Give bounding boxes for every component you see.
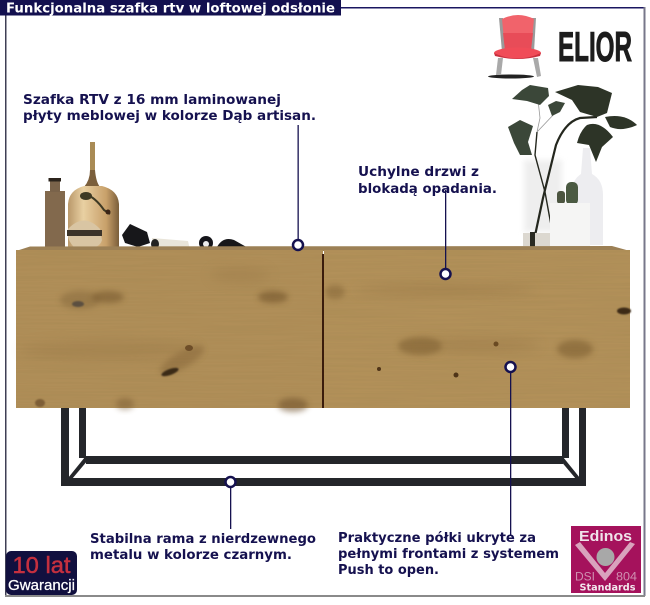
text: laminated board [23,93,316,124]
text: shelves: Praktyczne półki ukryte za [338,531,536,546]
Edinos certificate badge: Edinos [579,529,632,545]
text: shelves: pełnymi frontami z systemem [338,547,559,562]
cabinet top [16,246,630,251]
text: laminated board: Szafka RTV z 16 mm laminowanej [23,93,281,108]
text: frame [90,532,316,563]
text: shelves [338,531,559,578]
right door [324,250,631,408]
metal frame [61,408,586,486]
decor: plant and vases [508,85,637,249]
warranty badge: Gwarancji [8,578,75,594]
base ring [523,232,550,247]
leader line: shelves [506,362,516,535]
logo: Elior [488,15,632,78]
cabinet [16,246,631,412]
leader line: frame [226,477,236,529]
text: shelves: Push to open. [338,563,439,578]
warranty badge: 10 lat [12,552,71,578]
Edinos certificate badge: DSI [575,570,595,584]
black stones and white objects [122,224,250,250]
stems [533,100,597,245]
icon: red chair [488,15,541,78]
left door [16,250,323,412]
text: doors: blokadą opadania. [358,182,497,197]
title: Funkcjonalna szafka rtv w loftowej odsłonie [6,2,335,16]
warranty badge [6,551,77,595]
leader line: doors [440,190,450,279]
Edinos certificate badge: 804 [616,570,637,584]
Edinos certificate badge: Standards [580,582,636,594]
text: doors [358,165,497,197]
text: frame: metalu w kolorze czarnym. [90,548,292,563]
decor: left objects [45,142,250,250]
ghost vases [524,148,603,245]
foliage clusters [508,85,565,155]
leaves [555,85,637,162]
Edinos certificate badge [571,526,641,594]
text: doors: Uchylne drzwi z [358,165,479,180]
cactus in white pot [550,182,590,249]
bottle [45,178,65,248]
text: laminated board: płyty meblowej w kolorze Dąb artisan. [23,109,316,124]
leader line: top left [293,125,303,250]
golden vase [67,142,119,248]
text: frame: Stabilna rama z nierdzewnego [90,532,316,547]
door gap [322,254,324,408]
